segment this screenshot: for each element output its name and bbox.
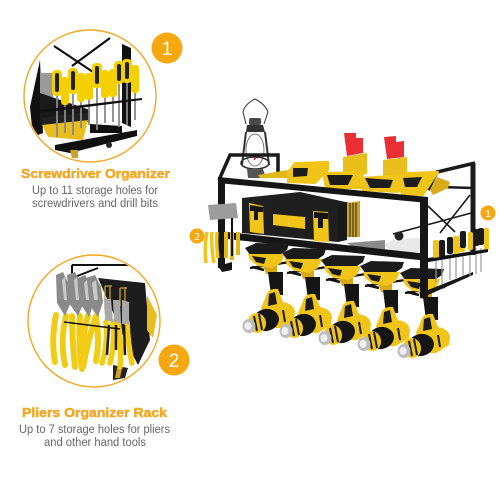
drill 3 bbox=[318, 255, 371, 347]
panel: screwdriver organizer bbox=[21, 30, 182, 210]
rack callout 2 bbox=[190, 228, 204, 244]
rack callout 2: 2 bbox=[194, 232, 200, 243]
heading: screwdriver organizer: Screwdriver Organizer bbox=[21, 166, 170, 181]
description: screwdriver organizer: screwdrivers and drill bits bbox=[32, 198, 158, 210]
description: screwdriver organizer: Up to 11 storage holes for bbox=[32, 185, 158, 197]
rack callout 1 bbox=[480, 206, 496, 220]
photo: screwdrivers in rack bbox=[30, 38, 142, 158]
description: pliers organizer bbox=[19, 424, 170, 449]
front post and lower rail bbox=[218, 202, 473, 298]
drill 4 bbox=[358, 261, 410, 353]
rack shelves bbox=[218, 177, 488, 270]
description: screwdriver organizer bbox=[32, 185, 158, 210]
rack callout 1: 1 bbox=[485, 209, 491, 220]
heading: pliers organizer rack: Pliers Organizer Rack bbox=[22, 405, 168, 420]
toolbox bbox=[242, 192, 360, 242]
drill 5 bbox=[398, 268, 450, 360]
badge 2: 2 bbox=[169, 351, 179, 372]
photo: pliers on rack bbox=[53, 265, 157, 380]
badge 2 bbox=[158, 344, 190, 376]
screwdrivers on right of rack bbox=[428, 228, 489, 284]
rack rear rails bbox=[219, 155, 475, 255]
drill 1 bbox=[242, 243, 295, 335]
pliers on left of rack bbox=[205, 203, 238, 263]
description: pliers organizer: and other hand tools bbox=[44, 437, 146, 449]
batteries on top shelf bbox=[258, 133, 450, 195]
circle outline bbox=[28, 255, 160, 387]
badge 1: 1 bbox=[162, 39, 172, 60]
description: pliers organizer: Up to 7 storage holes for pliers bbox=[19, 424, 170, 436]
badge 1 bbox=[152, 32, 182, 64]
lantern bbox=[241, 99, 269, 178]
circle outline bbox=[24, 30, 156, 162]
drill 2 bbox=[280, 248, 332, 340]
panel: pliers organizer bbox=[19, 255, 190, 449]
panel: full tool rack bbox=[190, 99, 496, 360]
small charger and plug bbox=[347, 232, 428, 255]
